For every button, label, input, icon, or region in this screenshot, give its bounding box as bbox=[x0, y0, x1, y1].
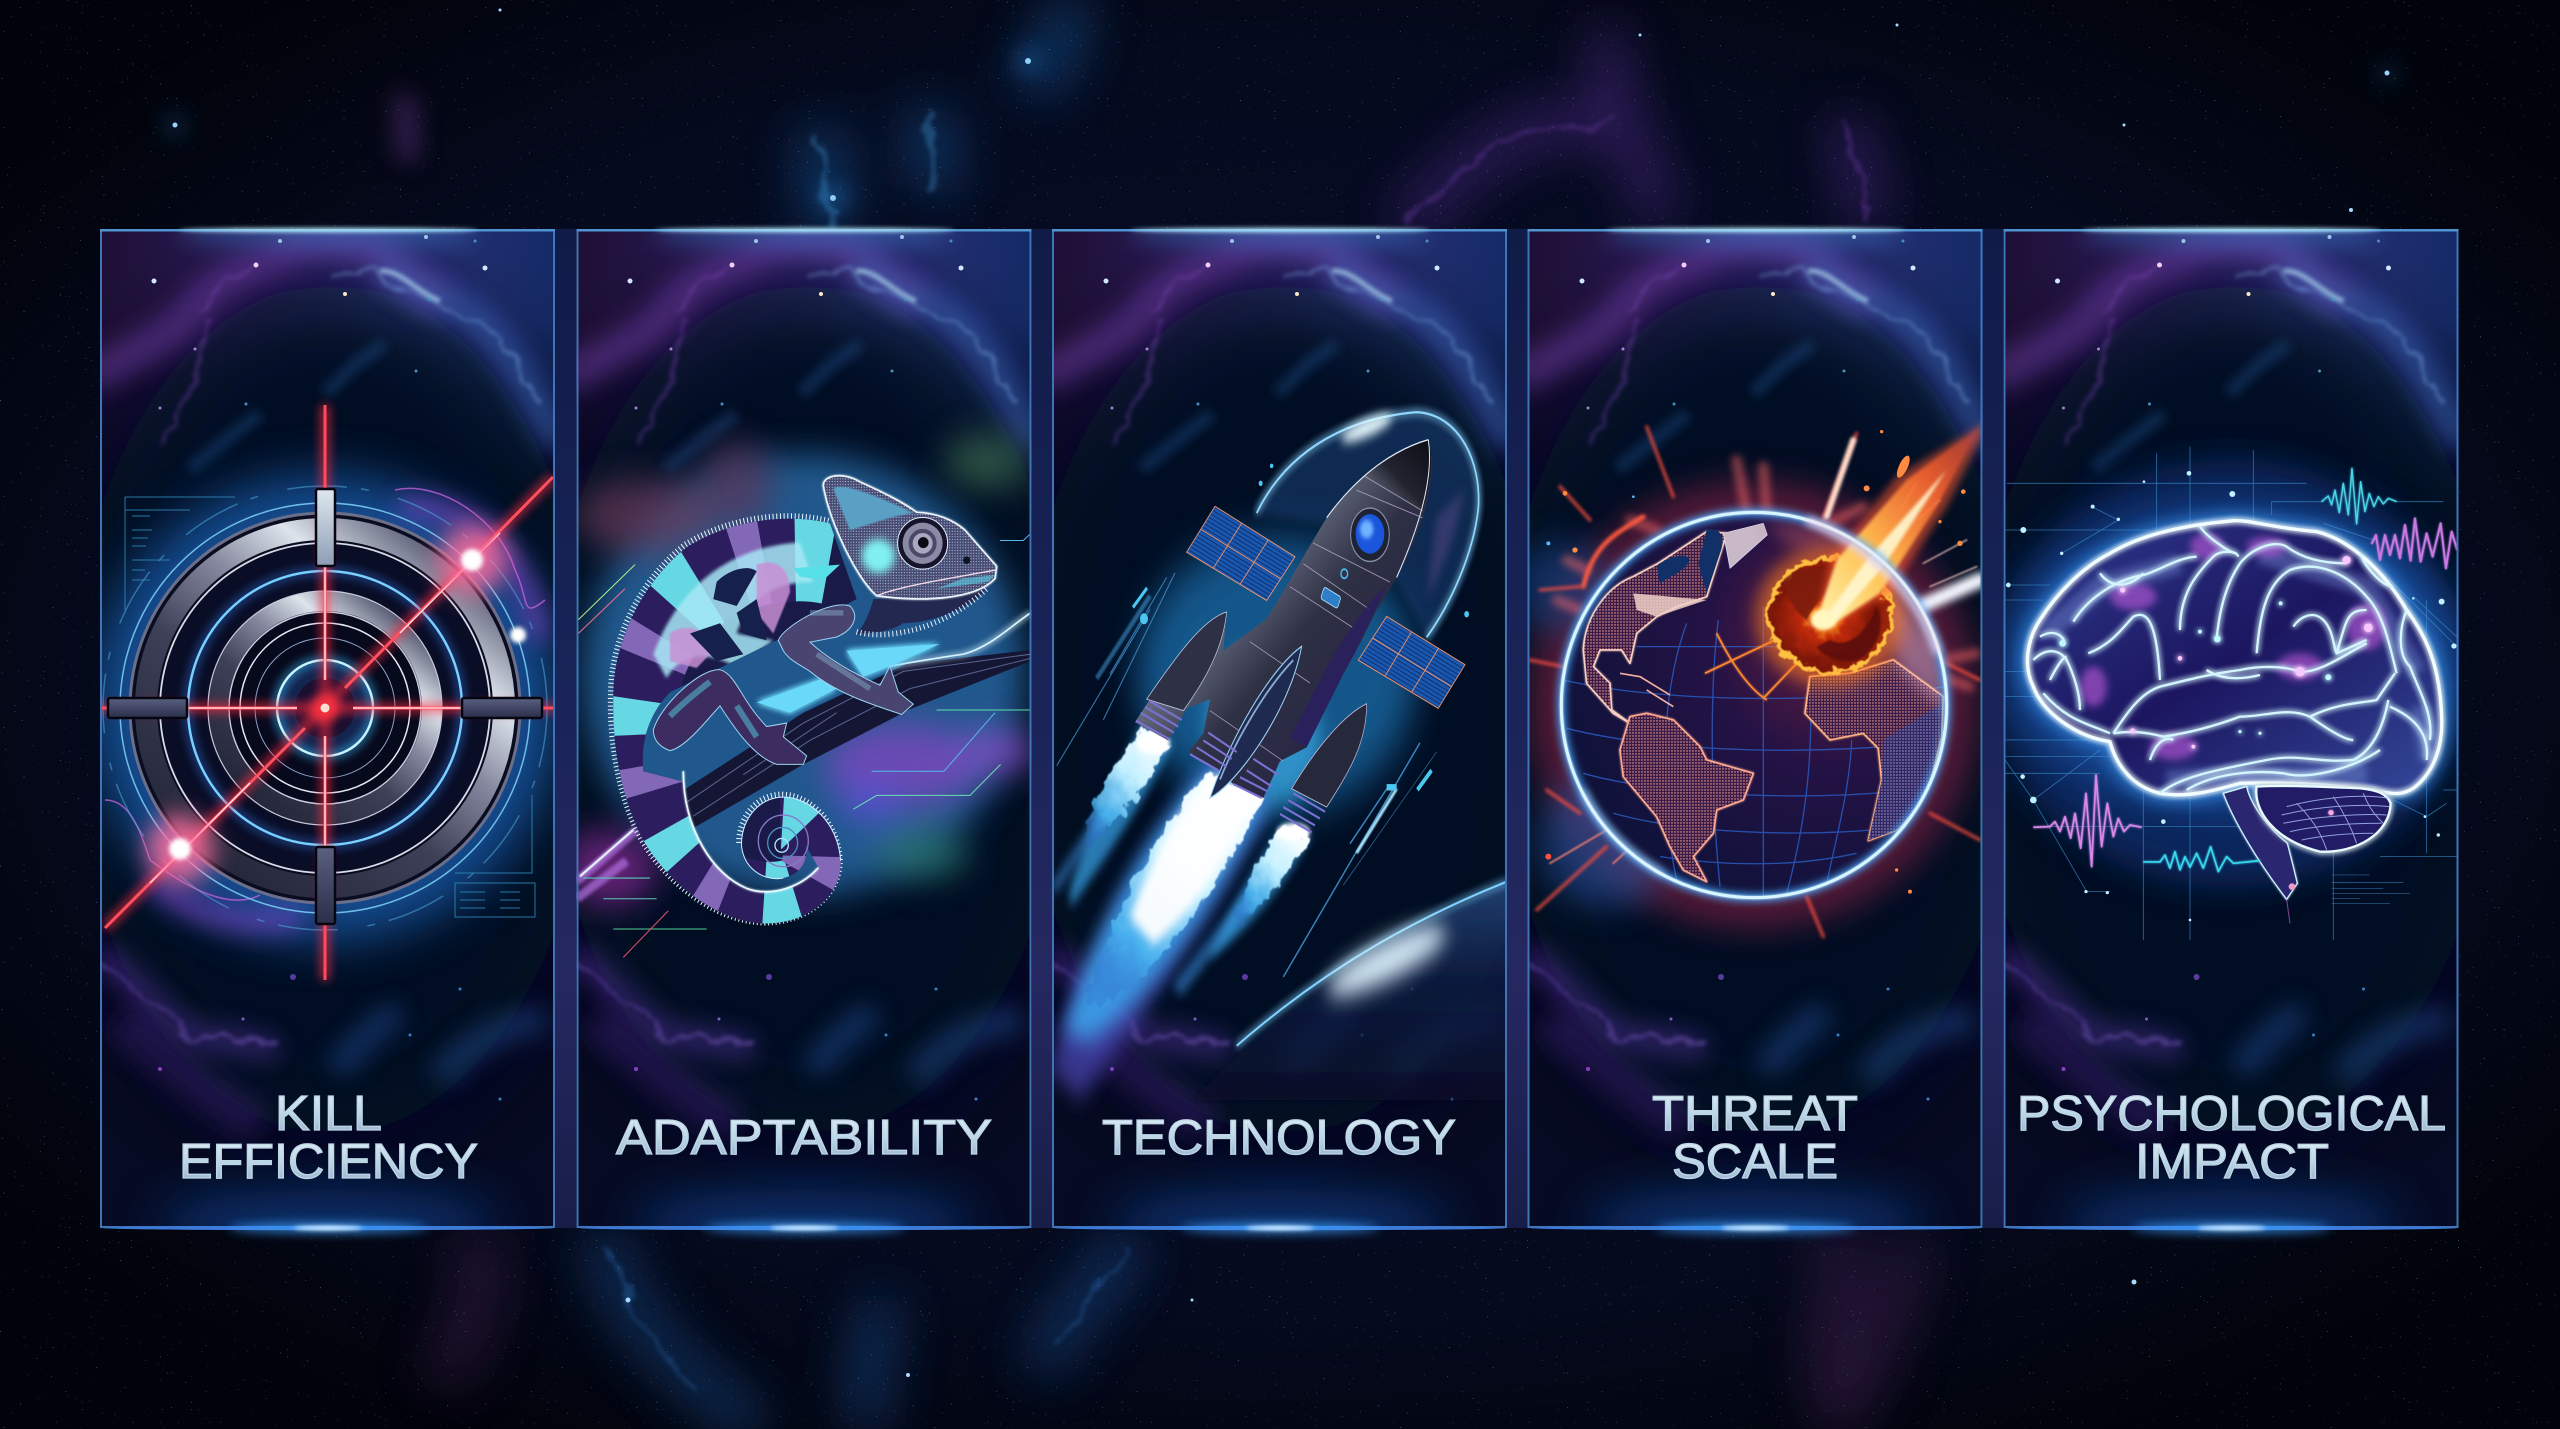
globe body bbox=[1561, 512, 1950, 898]
panel: adaptability bbox=[576, 224, 1032, 1241]
reticle tabs bbox=[108, 489, 542, 924]
speed lines bbox=[1053, 573, 1437, 991]
branch bbox=[577, 613, 1031, 899]
circuit traces bbox=[578, 534, 1031, 957]
data readout bbox=[2332, 875, 2410, 903]
rocket fuselage bbox=[1135, 440, 1431, 798]
continents bbox=[1583, 523, 1943, 882]
label: threat scale: SCALE bbox=[1672, 1135, 1838, 1189]
label: psychological impact: PSYCHOLOGICAL bbox=[2017, 1087, 2446, 1141]
energy shield arc bbox=[1257, 409, 1479, 637]
cerebellum and stem bbox=[2223, 786, 2391, 923]
chameleon body and tail bbox=[570, 420, 903, 937]
HUD readouts bbox=[125, 497, 535, 917]
engine nozzles bbox=[1136, 701, 1325, 832]
red laser lines bbox=[100, 405, 555, 980]
neural sparks bbox=[2059, 556, 2373, 749]
gutters between panels bbox=[555, 229, 2003, 1228]
explosion rays bbox=[1530, 427, 1980, 937]
icon: earth under impact bbox=[1517, 420, 1990, 937]
lens flares bbox=[146, 526, 526, 883]
label: psychological impact bbox=[2017, 1087, 2446, 1189]
panel: kill efficiency bbox=[100, 224, 555, 1241]
impact crater bbox=[1755, 547, 1905, 687]
folds bbox=[2028, 521, 2442, 795]
HUD ticks bbox=[1132, 464, 1469, 792]
incoming fire beam bbox=[1811, 420, 1990, 630]
brain hemisphere bbox=[2028, 521, 2442, 795]
solar panels bbox=[1187, 506, 1465, 708]
label: kill efficiency bbox=[179, 1087, 478, 1189]
icon: neural brain bbox=[1990, 447, 2470, 940]
icon: target crosshair bbox=[93, 405, 557, 980]
back leg bbox=[653, 670, 807, 764]
boosters bbox=[1147, 612, 1367, 807]
front leg bbox=[778, 605, 913, 714]
panel: threat scale bbox=[1498, 221, 2022, 1258]
panel: technology bbox=[1022, 221, 1546, 1258]
debris bbox=[1545, 430, 1966, 894]
icon: chameleon bbox=[563, 420, 1037, 957]
brainwave signals bbox=[2033, 468, 2457, 872]
circuit network bbox=[2005, 447, 2457, 940]
network nodes bbox=[2006, 471, 2457, 921]
label: adaptability: ADAPTABILITY bbox=[616, 1111, 992, 1165]
label: technology: TECHNOLOGY bbox=[1102, 1111, 1456, 1165]
label: psychological impact: IMPACT bbox=[2135, 1135, 2329, 1189]
label: kill efficiency: KILL bbox=[275, 1087, 382, 1141]
panel: psychological impact bbox=[1974, 221, 2498, 1258]
label: kill efficiency: EFFICIENCY bbox=[179, 1135, 478, 1189]
label: threat scale bbox=[1652, 1087, 1858, 1189]
globe atmosphere ring bbox=[1561, 512, 1947, 898]
exhaust flames bbox=[1050, 724, 1312, 1100]
planet horizon bbox=[1193, 881, 1507, 1100]
head bbox=[823, 476, 997, 635]
graticule bbox=[1563, 607, 1947, 897]
icon: rocket bbox=[1050, 409, 1507, 1100]
label: threat scale: THREAT bbox=[1652, 1087, 1858, 1141]
